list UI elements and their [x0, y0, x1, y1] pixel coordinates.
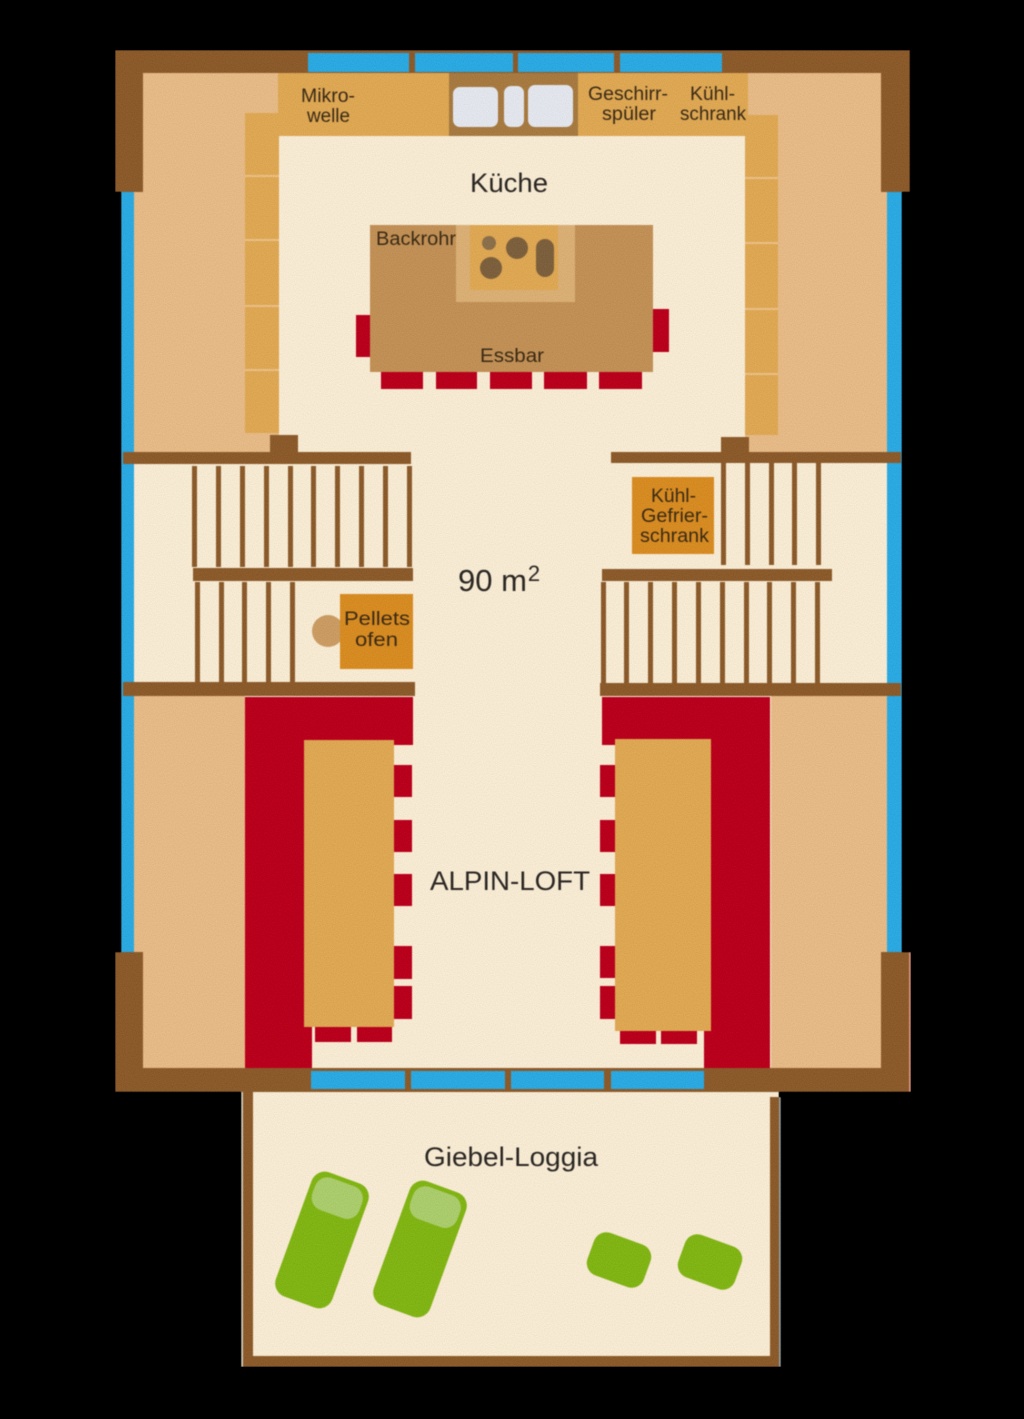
kitchen counter left: [278, 73, 449, 136]
stool 2: [674, 1231, 746, 1293]
left railings and post: [123, 435, 415, 696]
red carpet right: [602, 697, 770, 1068]
label: 90 m²: 2: [528, 561, 540, 586]
red carpet left: [245, 697, 413, 1068]
panel: loft floor: [134, 73, 887, 1068]
windows: bottom: [311, 1071, 704, 1089]
label: Mikrowelle: welle: [306, 106, 350, 127]
fridge-freezer: schrank: [640, 526, 710, 547]
left lower balusters: [195, 582, 295, 683]
windows: top: [308, 53, 722, 72]
pellet stove: ofen: [355, 630, 398, 651]
floor plan: [115, 50, 911, 1367]
panel: Giebel-Loggia: [241, 1092, 781, 1367]
fridge-freezer: Gefrier-: [641, 506, 708, 527]
pellet stove: [312, 594, 413, 669]
bar chairs: [356, 309, 669, 389]
panel: sleeping area right: [600, 697, 770, 1068]
bed right: [615, 739, 711, 1031]
label: Kühlschrank: Kühl-: [690, 84, 735, 105]
fridge-freezer: Kühl-: [651, 486, 696, 507]
seats right: [600, 765, 697, 1044]
left upper balusters: [192, 466, 412, 567]
panel: kitchen: [245, 73, 778, 435]
right wall cabinets: [745, 115, 778, 435]
sink: [449, 73, 578, 136]
panel: stair gallery: [123, 435, 901, 696]
label: Mikrowelle: Mikro-: [301, 86, 355, 107]
label: Backrohr: Backrohr: [376, 229, 457, 250]
label: Kühlschrank: schrank: [680, 104, 746, 125]
pellet stove: Pellets: [344, 609, 410, 630]
label: 90 m²: 90 m: [458, 563, 527, 598]
kitchen island: [370, 225, 653, 372]
heading: Küche: Küche: [470, 168, 548, 198]
stool 1: [583, 1229, 655, 1291]
label: Geschirrspüler: spüler: [602, 104, 657, 125]
label: Essbar: Essbar: [480, 346, 545, 367]
right lower balusters: [601, 582, 820, 683]
sun lounger 1: [271, 1168, 373, 1312]
seats left: [315, 765, 412, 1042]
fridge-freezer: [632, 477, 714, 554]
right railings and post: [600, 437, 901, 696]
sun lounger 2: [369, 1177, 471, 1321]
heading: Giebel-Loggia: Giebel-Loggia: [424, 1142, 599, 1172]
loggia floor and railing: [241, 1092, 781, 1367]
label: ALPIN-LOFT: ALPIN-LOFT: [430, 866, 590, 896]
label: Geschirrspüler: Geschirr-: [588, 84, 668, 105]
cooktop: [456, 225, 575, 302]
bed left: [304, 740, 394, 1027]
panel: sleeping area left: [245, 697, 413, 1068]
right upper balusters: [721, 463, 821, 565]
kitchen counter right: [578, 73, 748, 136]
panel: exterior walls: [115, 50, 911, 1092]
left wall cabinets: [245, 113, 279, 433]
